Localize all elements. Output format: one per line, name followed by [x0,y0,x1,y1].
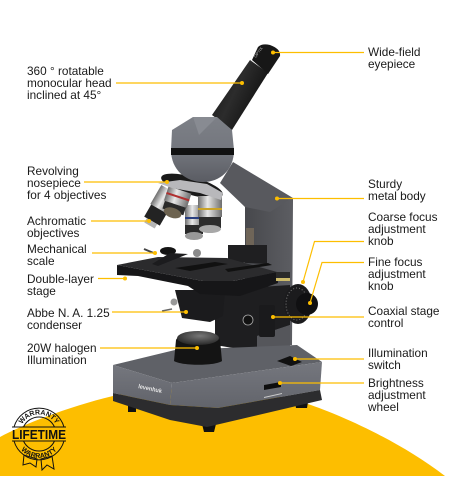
mechanism block below stage [215,285,290,352]
leader: brightness [278,381,364,385]
leader: mechanical scale [92,251,157,255]
objective far left [141,185,179,231]
label: objectives: objectives [27,226,80,240]
objectives [141,185,222,240]
leader: condenser [112,310,188,314]
label: coarse focus: Coarse focus [368,210,438,224]
halogen lamp [174,331,222,365]
objective rear [185,205,203,240]
label: coaxial: Coaxial stage [368,304,439,318]
leader: metal body [275,196,364,200]
label: nosepiece: for 4 objectives [27,188,106,202]
label: stage: Double-layer [27,272,94,286]
leader lines [84,50,364,385]
label: halogen: Illumination [27,353,87,367]
leader: nosepiece [84,180,169,184]
label: coaxial: control [368,316,403,330]
label: objectives: Achromatic [27,214,86,228]
label: condenser: Abbe N. A. 1.25 [27,306,110,320]
objective right [198,196,222,233]
left labels [27,64,112,367]
label: switch: switch [368,358,401,372]
label: coarse focus: knob [368,234,394,248]
leader: fine focus [308,262,364,305]
logo: levenhuk [138,384,163,395]
warranty badge [12,408,66,471]
leader: coarse focus [301,242,364,284]
warranty badge: LIFETIME [12,427,66,442]
rear arm [220,162,293,345]
label: nosepiece: nosepiece [27,176,81,190]
microscope [113,44,322,432]
head [171,117,234,182]
leader: objectives [91,219,151,223]
label: scale: scale [27,254,55,268]
label: halogen: 20W halogen [27,341,97,355]
leader: monocular head [116,81,244,85]
label: nosepiece: Revolving [27,164,79,178]
label: fine focus: Fine focus [368,255,422,269]
condenser [162,290,225,322]
label: head: 360 ° rotatable [27,64,104,78]
label: body: metal body [368,189,426,203]
eyepiece tube [212,44,280,130]
base [113,345,322,432]
coaxial stage control [259,305,275,337]
leader: halogen [100,346,199,350]
leader: coaxial [271,315,364,319]
stage [117,247,290,296]
eyepiece tube: OPTIX [253,46,264,59]
label: eyepiece: Wide-field [368,45,420,59]
focus knobs [284,284,318,324]
label: coarse focus: adjustment [368,222,426,236]
warranty badge: WARRANTY [18,410,60,424]
right labels [367,45,440,414]
label: condenser: condenser [27,318,82,332]
label: fine focus: knob [368,279,394,293]
yellow background arc [0,389,445,476]
objective centre [160,186,191,221]
label: head: monocular head [27,76,112,90]
nosepiece plate [158,180,223,200]
label: stage: stage [27,284,56,298]
leader: switch [293,357,364,361]
label: wheel: Brightness [368,376,424,390]
leader: stage [98,276,127,280]
label: scale: Mechanical [27,242,87,256]
warranty badge: WARRANTY [22,446,56,458]
label: body: Sturdy [368,177,402,191]
nosepiece ring [159,169,225,203]
label: wheel: adjustment [368,388,426,402]
label: fine focus: adjustment [368,267,426,281]
label: wheel: wheel [367,400,399,414]
leader: eyepiece [271,50,364,54]
label: eyepiece: eyepiece [368,57,416,71]
label: head: inclined at 45° [27,88,102,102]
label: switch: Illumination [368,346,428,360]
